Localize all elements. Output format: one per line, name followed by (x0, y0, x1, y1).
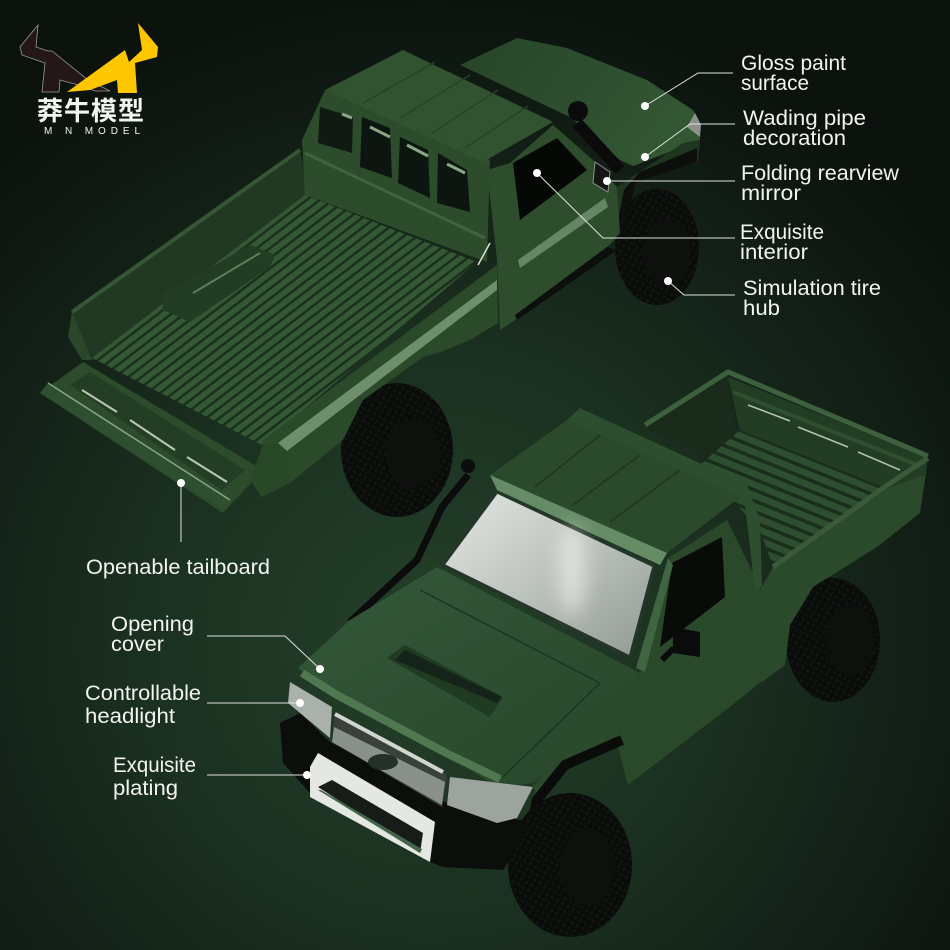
bed rail (645, 372, 928, 567)
rack windows (318, 107, 470, 212)
wheel arch (523, 740, 622, 860)
snorkel (350, 459, 475, 622)
label: simulation tire hub (743, 277, 881, 320)
folding mirror (593, 162, 610, 192)
wheel hump (163, 245, 275, 322)
label: folding rearview mirror: mirror (741, 182, 801, 205)
rack rail (305, 153, 485, 238)
label: controllable headlight: headlight (85, 705, 175, 728)
bed floor with ribs (92, 195, 477, 445)
label: simulation tire hub: hub (743, 297, 780, 320)
cab back rack (302, 90, 490, 262)
label: exquisite plating: plating (113, 777, 178, 800)
door sill (515, 247, 617, 320)
A-pillar right (636, 558, 673, 672)
cab roof (490, 420, 740, 553)
truck: upper rear view (40, 38, 701, 517)
label: openable tailboard: Openable tailboard (86, 556, 270, 579)
label: folding rearview mirror (741, 162, 900, 205)
label: controllable headlight (85, 682, 201, 728)
snorkel (568, 101, 620, 170)
bed end wall (645, 375, 735, 460)
truck: lower front view (280, 372, 928, 937)
bed side (760, 457, 928, 682)
windshield (443, 492, 654, 657)
left headlight (288, 682, 332, 738)
hood (460, 38, 700, 166)
fender panel (533, 673, 640, 800)
hood crease (420, 590, 600, 777)
label: exquisite plating (113, 754, 196, 800)
label: wading pipe decoration (743, 107, 866, 150)
hood (298, 567, 640, 787)
near side panel (260, 265, 498, 497)
cab side door (487, 125, 620, 330)
hood scoop (387, 645, 503, 717)
tailboard (40, 362, 263, 513)
label: exquisite interior (740, 221, 824, 264)
label: simulation tire hub: Simulation tire (743, 277, 881, 300)
label: gloss paint surface: Gloss paint (741, 52, 846, 75)
label: gloss paint surface (741, 52, 846, 95)
grille (332, 712, 447, 807)
label: opening cover: cover (111, 633, 164, 656)
door window (513, 138, 587, 220)
hood front strip (302, 673, 500, 779)
bed far wall (72, 150, 310, 360)
label: wading pipe decoration: Wading pipe (743, 107, 866, 130)
label: gloss paint surface: surface (741, 72, 809, 95)
bed floor with ribs (700, 430, 883, 567)
side window (660, 537, 725, 647)
tail corner (250, 443, 290, 497)
cab roof (325, 50, 553, 162)
rear wheel (786, 578, 880, 702)
bumper small highlight (478, 243, 490, 265)
logo: name: 莽牛模型 (37, 96, 144, 126)
fender (600, 140, 700, 247)
leader lines (177, 73, 735, 779)
label: opening cover (111, 613, 194, 656)
label: folding rearview mirror: Folding rearview (741, 162, 900, 185)
right headlight (447, 777, 533, 823)
label: exquisite interior: Exquisite (740, 221, 824, 244)
cab side (617, 520, 763, 785)
logo: dark horn (20, 25, 110, 92)
front wheel (508, 793, 632, 937)
door mirror (662, 627, 700, 660)
label: opening cover: Opening (111, 613, 194, 636)
plating (310, 753, 435, 862)
front wheel (615, 189, 699, 305)
side strip (278, 280, 497, 451)
windshield header highlight (490, 475, 667, 565)
logo: latin name: M N MODEL (44, 126, 140, 137)
label: exquisite plating: Exquisite (113, 754, 196, 777)
label: controllable headlight: Controllable (85, 682, 201, 705)
bumper black (280, 713, 533, 870)
headlamp sliver (687, 113, 701, 137)
logo (20, 23, 158, 137)
cab pillar and rail (567, 408, 762, 590)
logo: yellow horn (67, 23, 158, 93)
label: exquisite interior: interior (740, 241, 808, 264)
rear wheel (341, 383, 453, 517)
door strip (518, 198, 608, 268)
bed far wall (728, 377, 928, 490)
label: wading pipe decoration: decoration (743, 127, 846, 150)
